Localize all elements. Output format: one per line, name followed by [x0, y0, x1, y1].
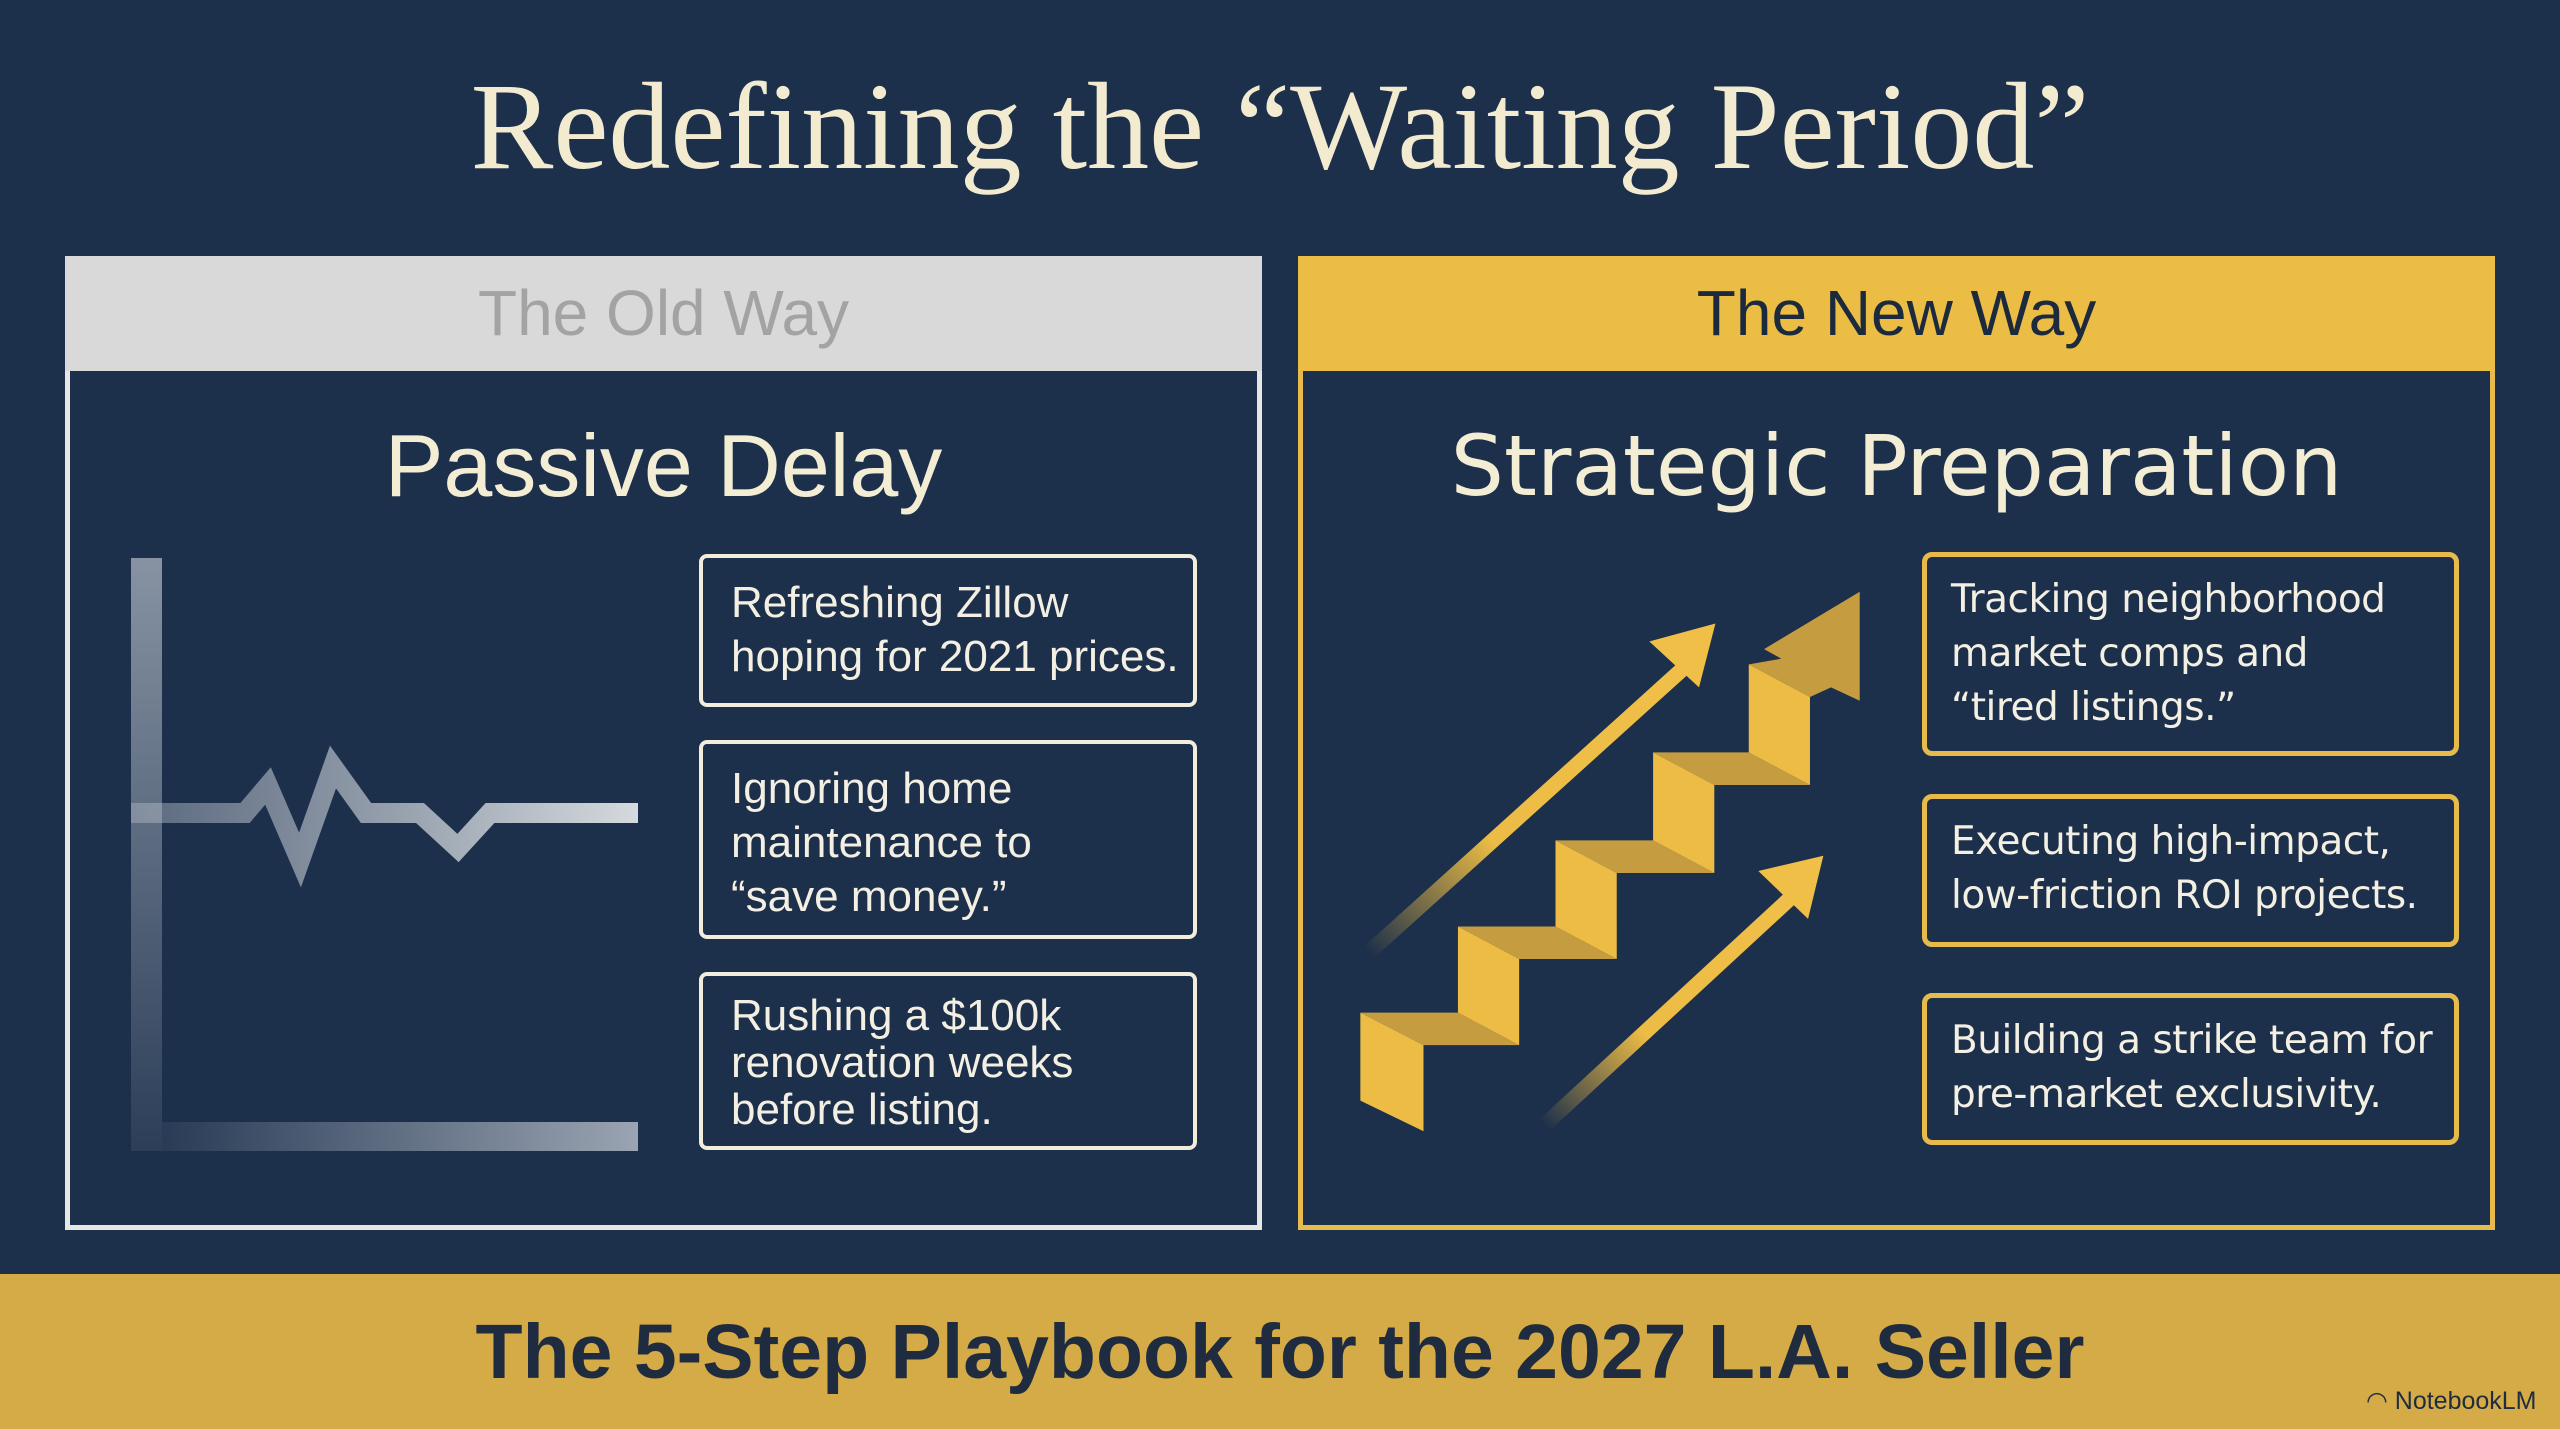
- old box 2: Ignoring home: [731, 764, 1012, 813]
- title: Redefining the “Waiting Period”: [471, 58, 2089, 195]
- new box 2: Executing high-impact,: [1951, 819, 2390, 864]
- notebooklm mark: ◠ NotebookLM: [2366, 1387, 2537, 1415]
- panel: new way: [1298, 256, 2495, 1230]
- old box 3: before listing.: [731, 1085, 993, 1134]
- footer banner: [0, 1274, 2560, 1429]
- old box 1: [699, 554, 1197, 707]
- new box 1: Tracking neighborhood: [1951, 577, 2385, 622]
- old box 1: Refreshing Zillow: [731, 578, 1068, 627]
- new box 3: Building a strike team for: [1951, 1018, 2432, 1063]
- new box 3: pre-market exclusivity.: [1951, 1072, 2381, 1117]
- heading: passive delay: Passive Delay: [385, 416, 942, 515]
- old box 1: hoping for 2021 prices.: [731, 632, 1179, 681]
- panel: old way: [65, 256, 1262, 1230]
- old box 2: “save money.”: [731, 872, 1006, 921]
- new box 2: low-friction ROI projects.: [1951, 873, 2418, 918]
- new box 1: “tired listings.”: [1951, 685, 2236, 730]
- old way header: The Old Way: [478, 277, 849, 349]
- icon: stairs with arrows: [1360, 592, 1860, 1132]
- old box 3: Rushing a $100k: [731, 991, 1061, 1040]
- old way header: [65, 256, 1262, 371]
- new box 1: [1922, 552, 2459, 756]
- new box 3: [1922, 993, 2459, 1145]
- heading: strategic preparation: Strategic Preparation: [1451, 417, 2342, 515]
- old box 3: [699, 972, 1197, 1150]
- new way header: [1298, 256, 2495, 371]
- chart: flat line: [131, 558, 638, 1151]
- new way header: The New Way: [1697, 277, 2096, 349]
- new box 1: market comps and: [1951, 631, 2308, 676]
- old box 2: maintenance to: [731, 818, 1032, 867]
- footer text: The 5-Step Playbook for the 2027 L.A. Seller: [476, 1309, 2084, 1395]
- old box 3: renovation weeks: [731, 1038, 1073, 1087]
- old box 2: [699, 740, 1197, 939]
- new box 2: [1922, 794, 2459, 947]
